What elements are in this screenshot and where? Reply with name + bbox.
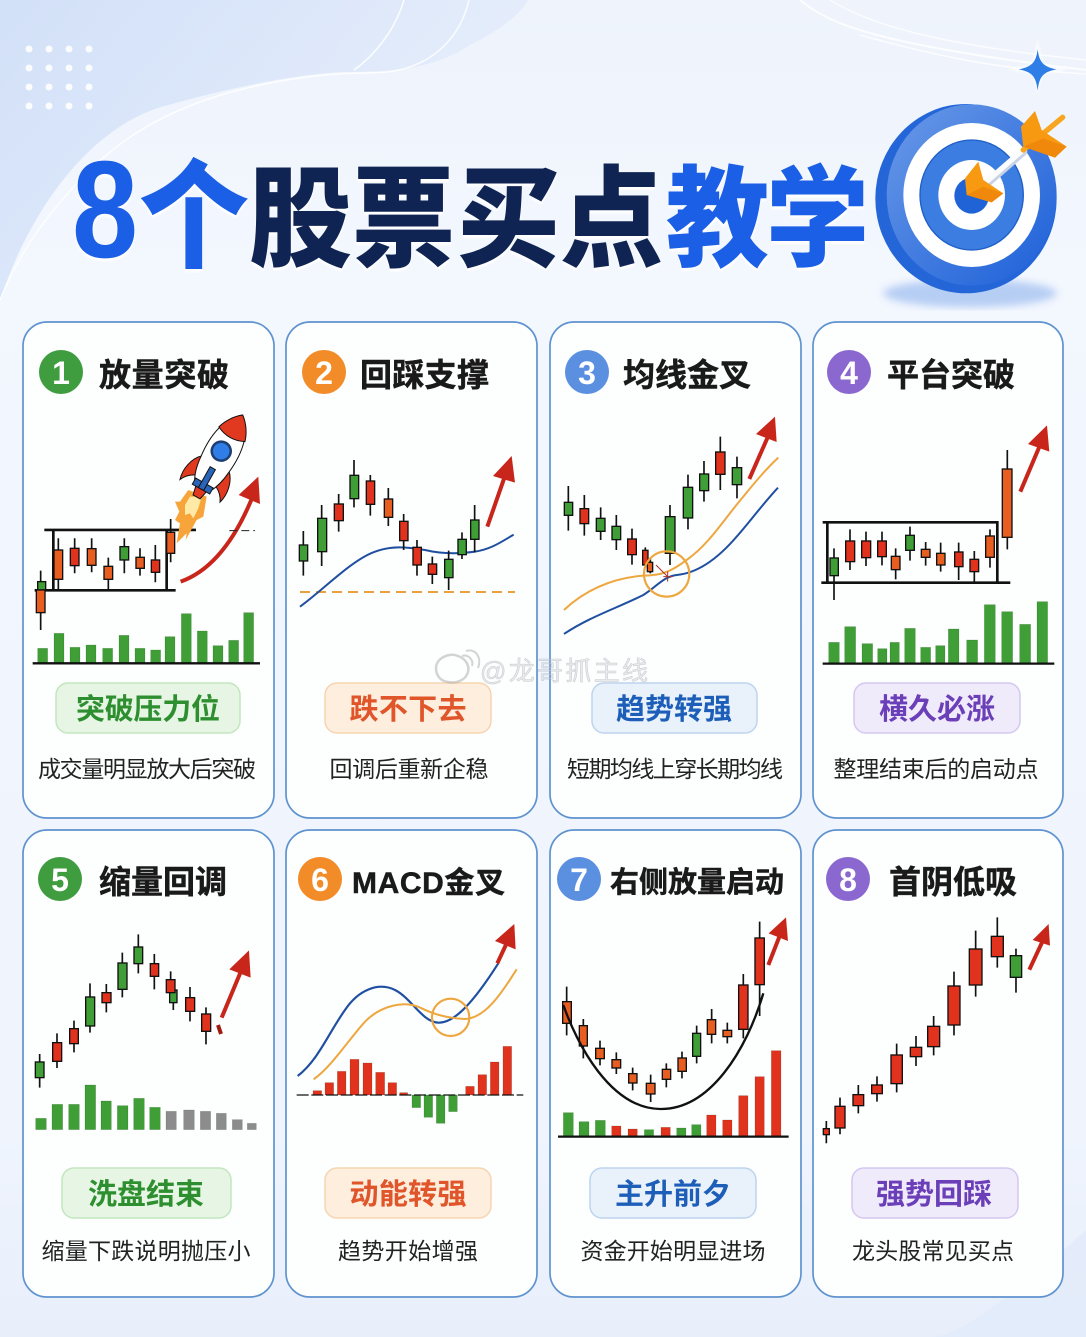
volume bars [36, 1085, 256, 1130]
badge 8: 8 [839, 862, 857, 898]
badge 4 [827, 350, 871, 394]
heading: 右侧放量启动 [610, 866, 784, 899]
title: 股 [249, 159, 352, 282]
title: 点 [560, 159, 663, 282]
pullback chart [35, 934, 256, 1130]
description: 资金开始明显进场 [580, 1238, 766, 1264]
heading: MACD金叉 [352, 867, 505, 900]
tag: 动能转强 [350, 1178, 466, 1211]
tag [325, 1168, 491, 1218]
candlestick chart with rocket [33, 403, 264, 663]
badge 2: 2 [315, 355, 333, 391]
badge 6 [298, 857, 342, 901]
arrow: up [749, 417, 777, 479]
tag: 洗盘结束 [88, 1178, 204, 1211]
title: 8 [72, 133, 138, 287]
arrow: up [495, 924, 516, 963]
description: 趋势开始增强 [338, 1238, 478, 1264]
icon: rocket [175, 403, 264, 543]
title: 买 [457, 159, 560, 282]
title: 票 [352, 159, 455, 282]
panel: 放量突破 [23, 322, 274, 818]
cup curve [563, 993, 763, 1109]
tag: 突破压力位 [76, 693, 220, 726]
panel: 回踩支撑 [286, 322, 537, 818]
decorative dot grid [26, 46, 92, 110]
arrow: up [768, 917, 788, 965]
tag [56, 683, 240, 733]
badge 2 [302, 350, 346, 394]
volume bars [563, 1051, 781, 1137]
badge 5: 5 [51, 862, 69, 898]
callout: cross circle [644, 551, 689, 597]
description: 回调后重新企稳 [330, 756, 488, 782]
tag: 主升前夕 [615, 1178, 731, 1211]
cup pattern chart [558, 917, 789, 1137]
badge 1: 1 [52, 355, 70, 391]
panel: 平台突破 [813, 322, 1063, 818]
title: 个 [139, 152, 249, 284]
heading: 缩量回调 [99, 864, 227, 900]
arrow: up [487, 456, 515, 527]
badge 6: 6 [311, 862, 329, 898]
platform breakout chart [821, 425, 1054, 664]
icon: target with dart [875, 104, 1067, 307]
icon: sparkle star [1008, 38, 1068, 93]
description: 缩量下跌说明抛压小 [42, 1238, 250, 1264]
tag: 跌不下去 [350, 693, 466, 726]
title [72, 133, 869, 287]
heading: 首阴低吸 [889, 864, 1017, 900]
MACD histogram [313, 1046, 512, 1123]
badge 1 [39, 350, 83, 394]
rising candlestick chart [823, 917, 1050, 1143]
arrow: up [1020, 425, 1049, 492]
description: 龙头股常见买点 [852, 1238, 1014, 1264]
candlestick chart with golden cross [564, 417, 778, 634]
watermark [436, 650, 648, 686]
volume bars [829, 602, 1048, 664]
description: 成交量明显放大后突破 [38, 756, 256, 782]
tag [325, 683, 491, 733]
title: 学 [766, 159, 869, 282]
description: 短期均线上穿长期均线 [567, 756, 783, 782]
badge 4: 4 [840, 355, 858, 391]
tag: 强势回踩 [876, 1178, 992, 1211]
heading: 放量突破 [99, 357, 229, 393]
tag: 横久必涨 [879, 693, 995, 726]
badge 3 [565, 350, 609, 394]
tag [854, 683, 1020, 733]
title: 教 [666, 159, 769, 282]
badge 5 [38, 857, 82, 901]
panel: 首阴低吸 [813, 830, 1063, 1297]
description: 整理结束后的启动点 [834, 756, 1038, 782]
panel: 缩量回调 [23, 830, 274, 1297]
panel: MACD金叉 [286, 830, 537, 1297]
candlestick chart with support [299, 456, 515, 607]
tag [590, 1168, 756, 1218]
arrow: up [1029, 924, 1050, 970]
panel: 右侧放量启动 [550, 830, 801, 1297]
heading: 回踩支撑 [360, 357, 489, 393]
watermark: @龙哥抓主线 [480, 656, 648, 686]
badge 3: 3 [578, 355, 596, 391]
badge 8 [826, 857, 870, 901]
tag [592, 683, 757, 733]
badge 7: 7 [570, 862, 588, 898]
tag [62, 1168, 231, 1218]
callout: cross circle [432, 999, 469, 1036]
heading: 平台突破 [887, 357, 1015, 393]
MACD chart [297, 924, 523, 1123]
volume bars [38, 613, 254, 663]
heading: 均线金叉 [623, 357, 751, 393]
badge 7 [557, 857, 601, 901]
arrow: curved breakout [181, 477, 260, 582]
tag [852, 1168, 1018, 1218]
arrow: up [222, 950, 251, 1018]
tag: 趋势转强 [616, 693, 732, 726]
panel: 均线金叉 [550, 322, 801, 818]
